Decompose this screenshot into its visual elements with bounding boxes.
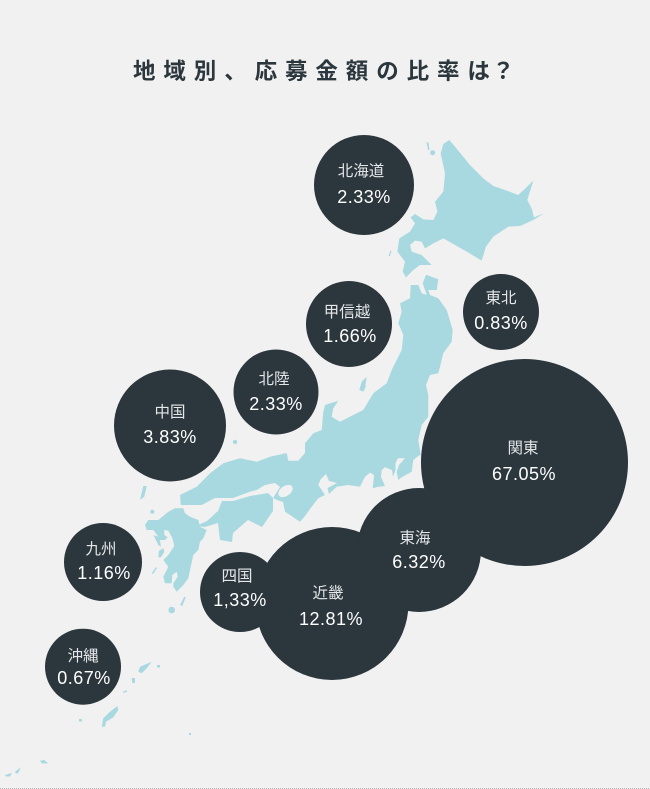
bubble: 四国	[200, 552, 280, 632]
bubble: 北海道: 北海道	[338, 162, 384, 180]
bubble: 関東	[421, 359, 628, 566]
bubble: 沖縄	[45, 629, 121, 705]
bubble: 九州	[64, 523, 142, 601]
bubble: 沖縄: 沖縄	[67, 647, 99, 665]
bubble: 甲信越	[306, 281, 392, 367]
bubble: 東北	[463, 274, 539, 350]
map: honshu	[180, 275, 453, 522]
bubble: 甲信越: 1.66%	[323, 326, 377, 346]
map: kyushu	[145, 508, 207, 592]
title: 地域別、応募金額の比率は？	[133, 59, 522, 84]
bubble: 四国: 1,33%	[213, 590, 267, 610]
bubble: 北海道	[314, 135, 414, 235]
bubble: 近畿: 12.81%	[299, 609, 363, 629]
map: shikoku	[196, 493, 273, 542]
bubble: 沖縄: 0.67%	[57, 668, 111, 688]
bubble: 北陸: 2.33%	[249, 394, 303, 414]
bubble: 四国: 四国	[221, 568, 253, 585]
map: osaka bay	[276, 482, 295, 500]
bubble: 甲信越: 甲信越	[324, 303, 371, 321]
bubble: 東北: 東北	[485, 289, 517, 307]
bubble: 関東: 関東	[507, 439, 539, 457]
bubble: 北陸	[234, 350, 318, 434]
bubble: 関東: 67.05%	[492, 464, 556, 484]
map: hokkaido	[397, 140, 544, 277]
bubble: 中国: 3.83%	[143, 427, 197, 447]
bubble: 北陸: 北陸	[258, 370, 290, 388]
bubble: 東海	[357, 488, 481, 612]
bubble: 近畿	[256, 527, 408, 680]
bubble: 近畿: 近畿	[312, 584, 344, 602]
bubble: 北海道: 2.33%	[337, 187, 391, 207]
bubble: 東北: 0.83%	[474, 313, 528, 333]
bubble: 中国: 中国	[154, 403, 186, 421]
bubble: 東海: 6.32%	[392, 552, 446, 572]
map: japan	[5, 140, 544, 777]
map: small islands	[140, 142, 435, 613]
bubble: 九州: 九州	[85, 540, 117, 558]
bubble: 東海: 東海	[399, 529, 431, 547]
bubble: 中国	[114, 370, 226, 482]
map: okinawa islands	[5, 662, 191, 776]
bubble: 九州: 1.16%	[77, 563, 131, 583]
